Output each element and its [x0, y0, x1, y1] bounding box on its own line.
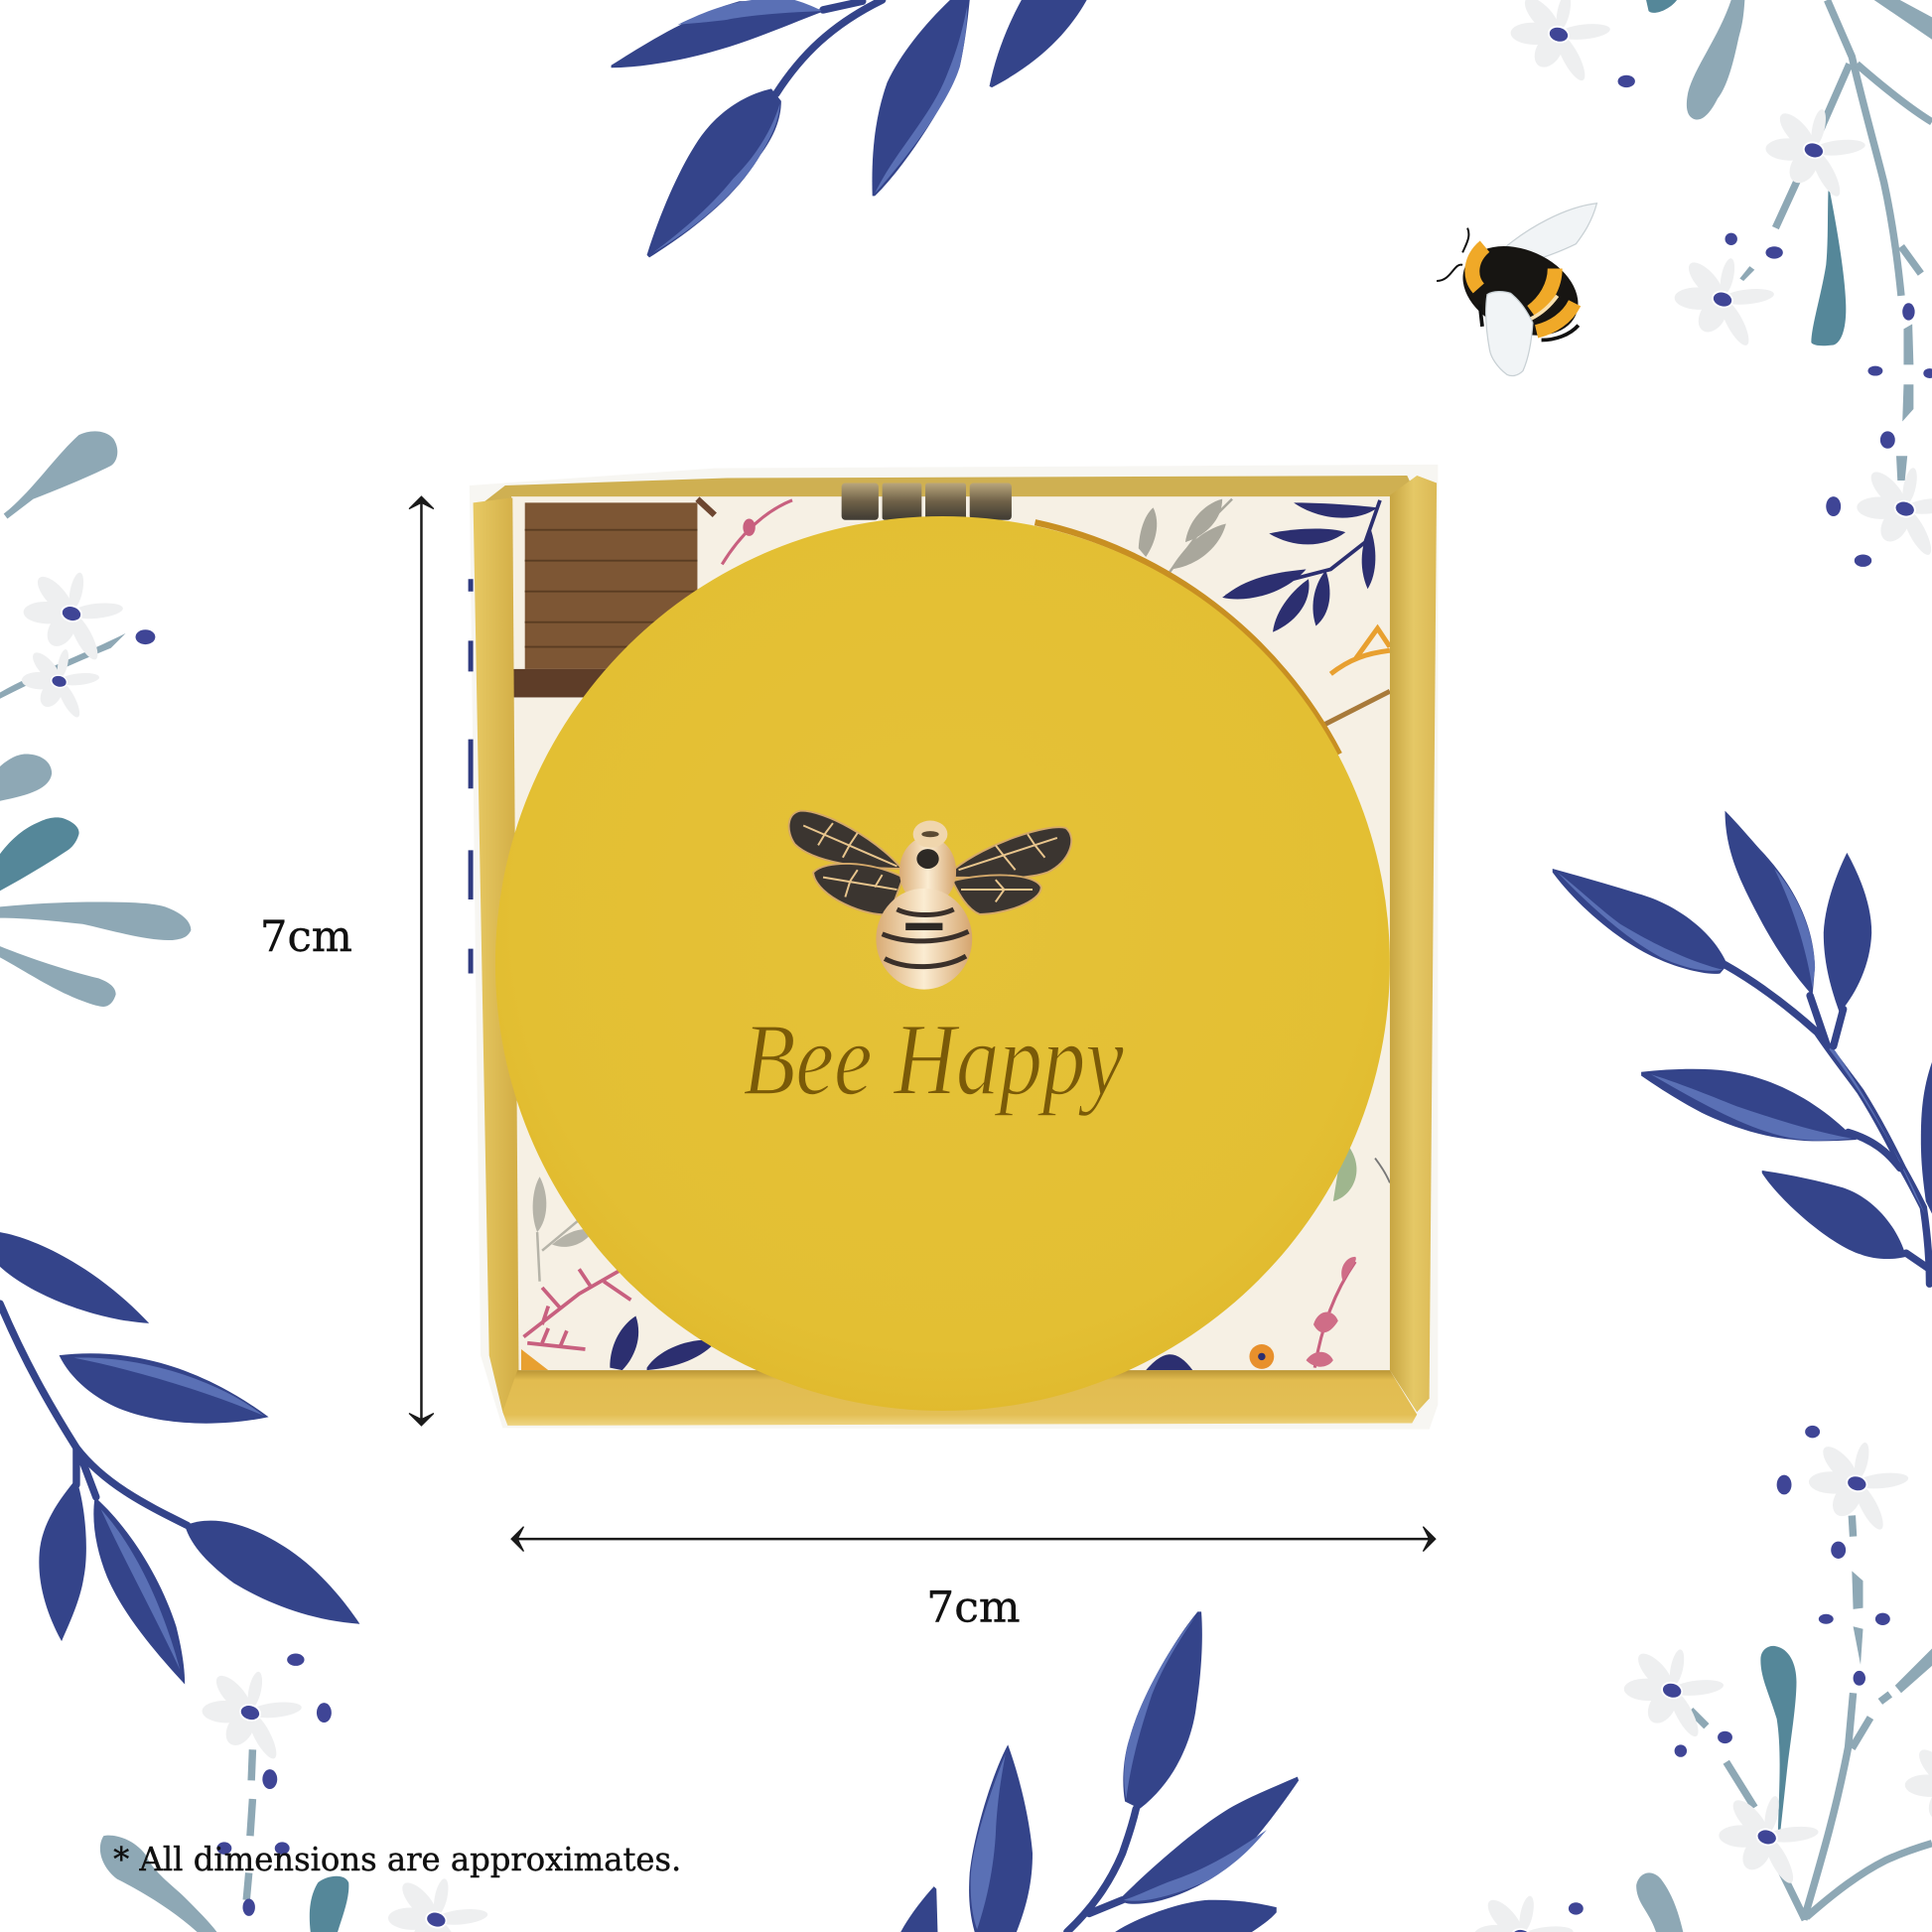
vertical dimension label: 7cm — [260, 912, 352, 962]
foil text: Bee Happy — [743, 1002, 1124, 1117]
compact mirror — [495, 516, 1390, 1411]
box liner paper — [511, 496, 1391, 1371]
vertical dimension arrow — [409, 496, 434, 1426]
liner print — [512, 499, 1390, 1370]
top blue leaves — [612, 0, 1087, 257]
box top wall — [483, 476, 1417, 502]
compact rim print — [1035, 522, 1339, 755]
grey sprig — [1139, 499, 1232, 579]
bottom right foliage — [1473, 1426, 1932, 1932]
bottom left sprigs — [533, 1176, 594, 1282]
navy sprig — [1222, 500, 1380, 632]
horizontal dimension arrow — [511, 1527, 1436, 1552]
bottom left foliage — [100, 1654, 488, 1932]
bottom right sprigs — [1314, 1262, 1355, 1368]
box outer paper — [470, 465, 1438, 1430]
box right wall — [1390, 476, 1437, 1412]
compact lid — [495, 516, 1390, 1411]
footnote: * All dimensions are approximates. — [113, 1840, 681, 1878]
panel: gift box — [469, 465, 1438, 1430]
box bottom wall — [502, 1370, 1417, 1426]
bottom blue leaves — [900, 1611, 1299, 1932]
pin: gold bee — [789, 811, 1071, 990]
left blue branch — [0, 1232, 359, 1685]
box left wall — [474, 497, 518, 1412]
left foliage upper — [0, 431, 191, 1007]
top right foliage — [1510, 0, 1932, 567]
hinge — [842, 483, 1012, 520]
icon: bumblebee — [1437, 204, 1596, 376]
right blue branch — [1553, 811, 1932, 1284]
horizontal dimension label: 7cm — [926, 1583, 1021, 1632]
